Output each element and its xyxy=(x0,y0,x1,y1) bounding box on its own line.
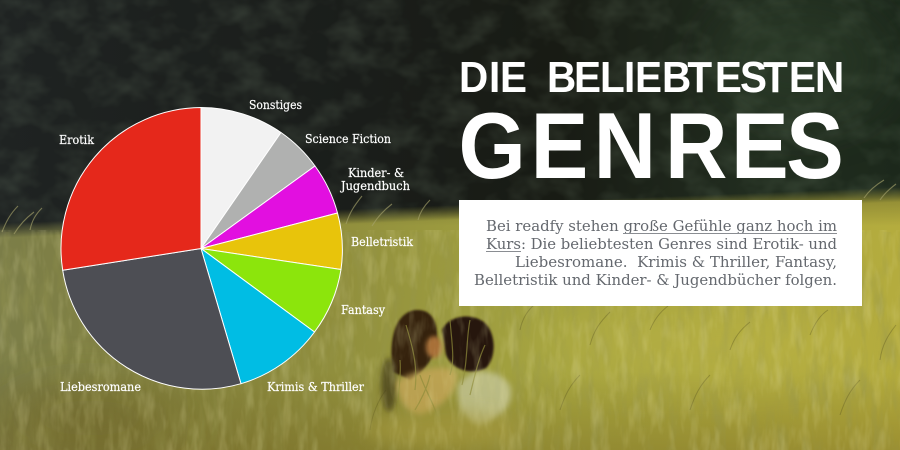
pie chart: genres xyxy=(61,108,342,389)
label: Kinder- & Jugendbuch xyxy=(339,166,410,193)
slice: Sonstiges xyxy=(201,108,281,248)
boy's hair xyxy=(442,316,494,372)
slice: Kinder- und Jugendbuch xyxy=(201,166,338,248)
pie labels xyxy=(59,98,414,394)
slice: Science Fiction xyxy=(201,132,315,248)
girl's dark top xyxy=(381,358,397,412)
title line 2: GENRES xyxy=(459,94,844,199)
label: Krimis & Thriller: Krimis & Thriller xyxy=(267,380,364,394)
slice: Krimis und Thriller xyxy=(201,248,314,384)
link underline xyxy=(486,234,837,252)
girl's shoulder xyxy=(396,368,457,415)
grass over the couple xyxy=(398,320,485,425)
slice: Liebesromane xyxy=(63,248,241,389)
label: Fantasy: Fantasy xyxy=(341,303,385,317)
label: Erotik: Erotik xyxy=(59,133,95,147)
title xyxy=(459,52,844,199)
label: Sonstiges: Sonstiges xyxy=(249,98,302,112)
faces xyxy=(426,336,442,358)
label: Belletristik: Belletristik xyxy=(351,235,414,249)
description text: Bei readfy stehen große Gefühle ganz hoch im xyxy=(486,217,837,235)
description text: Liebesromane. Krimis & Thriller, Fantasy, xyxy=(515,253,837,271)
girl's hair xyxy=(391,310,437,380)
boy's shirt xyxy=(458,371,511,425)
slice: Belletristik xyxy=(201,213,342,270)
description text xyxy=(474,217,837,289)
description text: Kurs: Die beliebtesten Genres sind Erotik- und xyxy=(486,235,837,253)
grass texture overlay xyxy=(0,230,900,450)
label: Kinder- & Jugendbuch: Kinder- & xyxy=(348,166,404,180)
label: Science Fiction: Science Fiction xyxy=(305,132,391,146)
description text: Belletristik und Kinder- & Jugendbücher folgen. xyxy=(474,271,837,289)
label: Kinder- & Jugendbuch: Jugendbuch xyxy=(339,179,410,193)
slice: Fantasy xyxy=(201,248,341,332)
panel: description text box xyxy=(459,200,862,306)
label: Liebesromane: Liebesromane xyxy=(60,380,141,394)
couple in the grass xyxy=(365,310,525,448)
slice: Erotik xyxy=(61,108,201,270)
title line 1: DIE BELIEBTESTEN xyxy=(459,52,844,101)
